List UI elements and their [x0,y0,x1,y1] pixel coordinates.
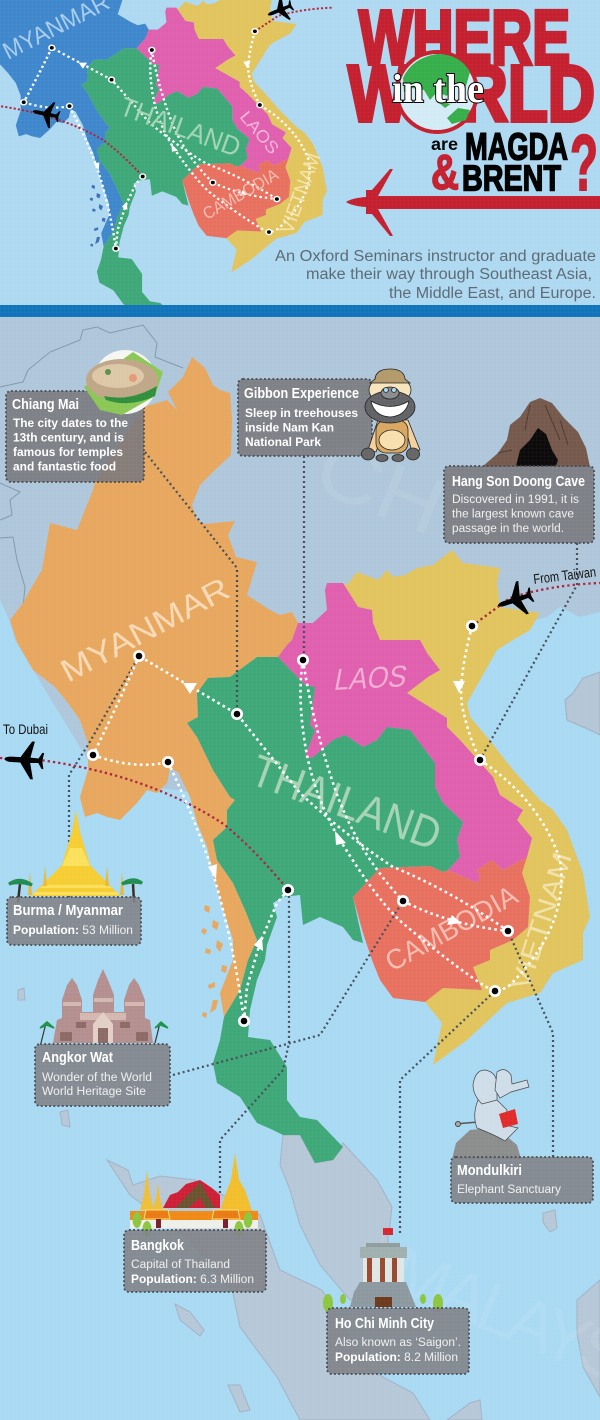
panel: Gibbon Experience: Gibbon Experience [244,386,359,402]
panel: Bangkok: Capital of Thailand [131,1259,230,1271]
panel: Chiang Mai: and fantastic food [13,462,116,474]
icon: noodle dish [84,350,163,415]
icon: elephant reading on a rock [452,1070,529,1159]
faint regional watermarks [304,421,600,1398]
faint regional watermarks: CH [304,421,458,552]
flight paths [0,583,600,890]
title: Where in the World are Magda & Brent?: are [431,134,458,154]
country: Laos [278,583,532,883]
panel: Ho Chi Minh City: Also known as ‘Saigon’. [335,1337,461,1349]
subtitle [275,248,596,302]
panel: Hang Son Doong Cave [444,398,594,543]
main map panel [0,317,600,1420]
country: Myanmar [10,357,298,1018]
country: Thailand [187,657,463,1163]
leader lines [69,452,577,1233]
icon: Ho Chi Minh mausoleum [323,1228,443,1312]
panel: Hang Son Doong Cave: Discovered in 1991, it is [452,494,579,506]
panel: Mondulkiri: Mondulkiri [457,1163,522,1179]
panel: Burma / Myanmar: Population: 53 Million [13,925,133,937]
subtitle: the Middle East, and Europe. [389,285,596,302]
panel: Gibbon Experience: Sleep in treehouses [245,408,358,420]
country labels: MYANMAR [54,570,236,689]
icon: plane from Taiwan [498,568,596,614]
country labels: THAILAND [245,744,448,860]
icon: red plane with trail [346,169,600,236]
panel: Hang Son Doong Cave: passage in the world. [452,523,564,535]
icon: plane to Dubai: To Dubai [3,721,48,737]
panel: Ho Chi Minh City: Population: 8.2 Million [335,1352,458,1364]
icon: Bangkok grand palace [130,1153,258,1237]
panel: Chiang Mai: famous for temples [13,447,123,459]
travel route [93,626,561,1021]
header map of Southeast Asia: LAOS [236,107,283,158]
panel: Chiang Mai: 13th century, and is [13,433,124,445]
title: Where in the World are Magda & Brent? [348,0,598,207]
panel: Angkor Wat: Wonder of the World [42,1072,152,1084]
panel: Chiang Mai [6,350,163,482]
header background [0,0,600,305]
blue divider band [0,305,600,317]
panel: Bangkok [124,1153,266,1292]
icon: golden pagoda [9,810,142,902]
panel: Mondulkiri: Elephant Sanctuary [457,1184,561,1196]
panel: Bangkok: Bangkok [131,1238,185,1254]
country labels: LAOS [332,659,410,697]
panel: Gibbon Experience [238,369,420,462]
panel: Angkor Wat: World Heritage Site [42,1086,146,1098]
country: Vietnam [343,550,590,1065]
panel: Burma / Myanmar: Burma / Myanmar [13,903,123,919]
panel: Gibbon Experience: inside Nam Kan [245,422,334,434]
icon: plane to Dubai [3,721,48,780]
country labels: VIETNAM [505,849,578,994]
panel: Angkor Wat: Angkor Wat [42,1050,113,1066]
subtitle: An Oxford Seminars instructor and graduate [275,248,596,265]
title: Where in the World are Magda & Brent?: & [431,146,459,200]
title: Where in the World are Magda & Brent?: in the [392,66,484,111]
header map of Southeast Asia [0,0,333,327]
panel: Mondulkiri [451,1070,593,1203]
subtitle: make their way through Southeast Asia, [306,266,592,283]
header map of Southeast Asia: THAILAND [116,91,245,163]
title: Where in the World are Magda & Brent?: BRENT [462,158,561,198]
route stops [87,620,514,1027]
icon: gibbon explorer [362,369,420,462]
globe [397,52,477,132]
panel: Chiang Mai: Chiang Mai [12,397,79,413]
icon: cave [482,398,590,467]
country: Cambodia [353,857,530,1002]
icon: Angkor Wat temple [40,969,168,1043]
header map of Southeast Asia: VIETNAM [276,150,325,237]
panel: Chiang Mai: The city dates to the [13,418,128,430]
panel: Ho Chi Minh City [323,1228,469,1374]
panel: Angkor Wat [35,969,170,1106]
header map of Southeast Asia: CAMBODIA [200,165,282,223]
panel: Hang Son Doong Cave: the largest known cave [452,508,574,520]
panel: Gibbon Experience: National Park [245,437,322,449]
panel: Bangkok: Population: 6.3 Million [131,1274,254,1286]
panel: Burma / Myanmar [7,810,142,945]
country labels: CAMBODIA [380,879,523,977]
country labels [54,570,578,994]
panel: Ho Chi Minh City: Ho Chi Minh City [335,1316,434,1332]
